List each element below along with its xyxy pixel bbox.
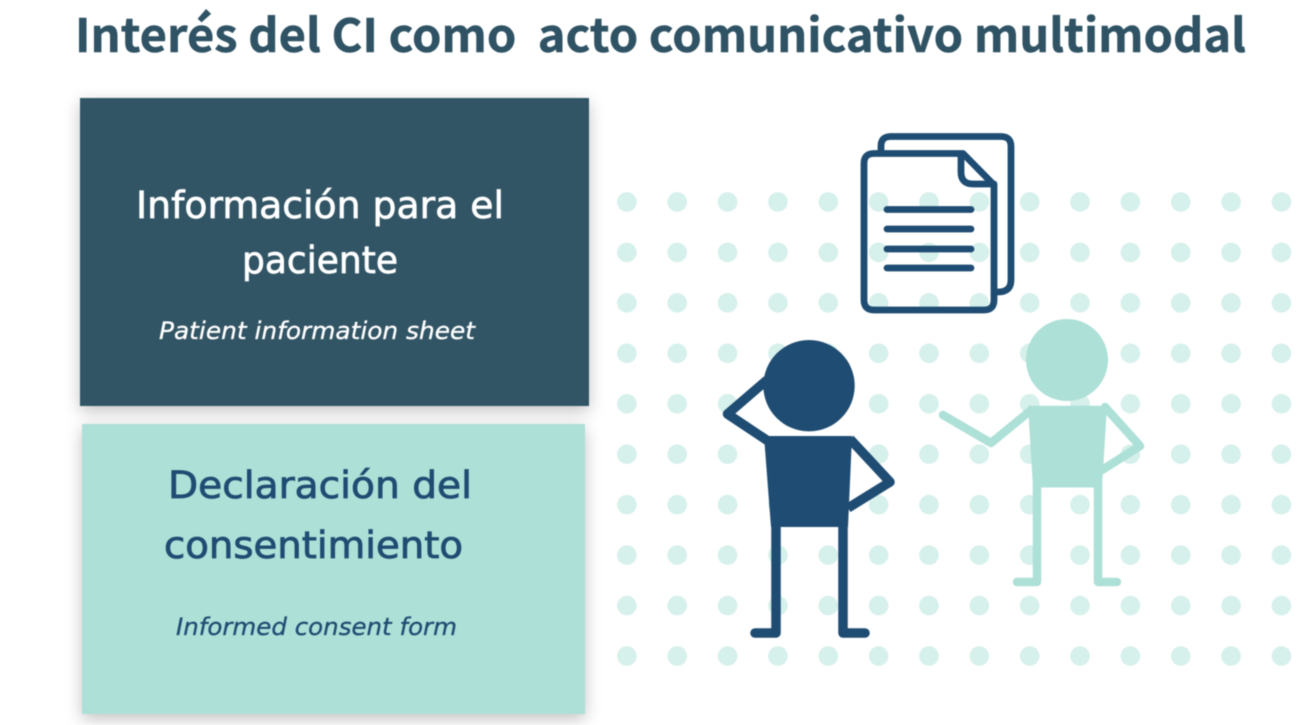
panel heading: declaración: Declaración del: [168, 464, 472, 507]
legs and feet: [1017, 485, 1117, 582]
figure: person scratching head: [728, 340, 890, 633]
torso: [764, 436, 852, 527]
torso: [1028, 406, 1107, 488]
panel: información para el paciente: [80, 98, 589, 406]
panel subtitle: informed consent form: Informed consent form: [176, 613, 457, 641]
arms: [943, 407, 1140, 470]
head: [763, 340, 855, 431]
panel heading: información: Información para el: [136, 184, 504, 227]
panel heading: declaración: consentimiento: [164, 524, 463, 567]
dot pattern background: [612, 187, 1300, 672]
panel subtitle: patient information sheet: Patient information sheet: [159, 317, 477, 345]
figure: person explaining: [943, 319, 1140, 582]
panel heading: información: paciente: [242, 239, 398, 282]
panel heading: información: [136, 184, 504, 282]
panel: declaración del consentimiento: [82, 424, 585, 714]
legs and feet: [755, 525, 865, 633]
icon: documents: [864, 136, 1011, 310]
title: Interés del CI como acto comunicativo multimodal: [75, 0, 1246, 66]
panel heading: declaración: [164, 464, 472, 567]
head: [1026, 319, 1108, 401]
arms: [728, 380, 890, 508]
